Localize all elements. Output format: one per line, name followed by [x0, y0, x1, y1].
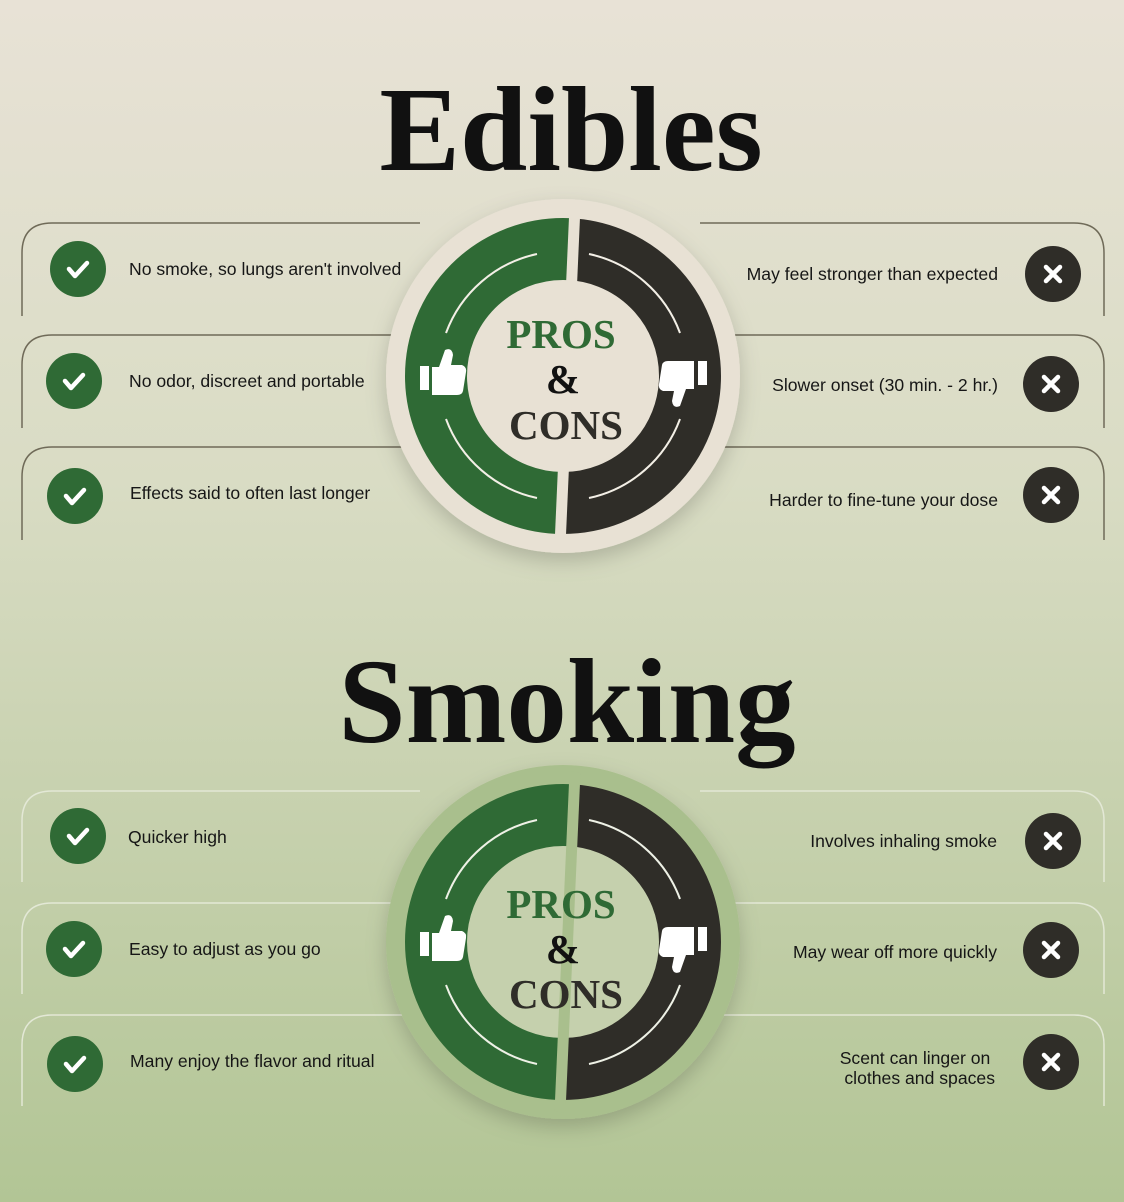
- center label: CONS: [509, 971, 623, 1017]
- icon: cross 2: [1023, 356, 1079, 412]
- text: pro 1: No smoke, so lungs aren't involved: [129, 259, 401, 279]
- icon: thumbs down: [659, 927, 707, 973]
- smoking pros list: [46, 808, 374, 1092]
- icon: thumbs up: [420, 349, 466, 395]
- text: pro 3: Effects said to often last longer: [130, 483, 370, 503]
- icon: check 3: [47, 468, 103, 524]
- icon: check 2: [46, 353, 102, 409]
- center label: CONS: [509, 402, 623, 448]
- text: con 2: Slower onset (30 min. - 2 hr.): [772, 375, 998, 395]
- icon: cross 1: [1025, 813, 1081, 869]
- center label: [506, 311, 623, 448]
- center label: [506, 881, 623, 1017]
- text: con 3: Scent can linger on: [840, 1048, 990, 1068]
- icon: check 1: [50, 808, 106, 864]
- text: con 2: May wear off more quickly: [793, 942, 997, 962]
- center label: PROS: [506, 311, 616, 357]
- smoking rows frames: [22, 791, 1104, 1106]
- edibles cons list: [747, 246, 1081, 523]
- text: pro 1: Quicker high: [128, 827, 227, 847]
- center label: &: [546, 926, 580, 972]
- icon: cross 2: [1023, 922, 1079, 978]
- edibles pros & cons badge: [386, 199, 740, 553]
- icon: cross 1: [1025, 246, 1081, 302]
- icon: cross 3: [1023, 467, 1079, 523]
- center label: PROS: [506, 881, 616, 927]
- text: pro 3: Many enjoy the flavor and ritual: [130, 1051, 374, 1071]
- text: pro 2: No odor, discreet and portable: [129, 371, 365, 391]
- title: Edibles: Edibles: [379, 63, 763, 197]
- icon: thumbs down: [659, 361, 707, 407]
- icon: check 2: [46, 921, 102, 977]
- text: con 1: Involves inhaling smoke: [810, 831, 997, 851]
- smoking cons list: [793, 813, 1081, 1090]
- icon: check 3: [47, 1036, 103, 1092]
- title: Smoking: Smoking: [338, 635, 796, 769]
- edibles pros list: [46, 241, 401, 524]
- text: pro 2: Easy to adjust as you go: [129, 939, 321, 959]
- icon: thumbs up: [420, 915, 466, 961]
- center label: &: [546, 356, 580, 402]
- smoking pros & cons badge: [386, 765, 740, 1119]
- text: con 1: May feel stronger than expected: [747, 264, 998, 284]
- icon: check 1: [50, 241, 106, 297]
- text: con 3: Harder to fine-tune your dose: [769, 490, 998, 510]
- icon: cross 3: [1023, 1034, 1079, 1090]
- edibles rows frames: [22, 223, 1104, 540]
- text: con 3 line 2: clothes and spaces: [844, 1068, 995, 1088]
